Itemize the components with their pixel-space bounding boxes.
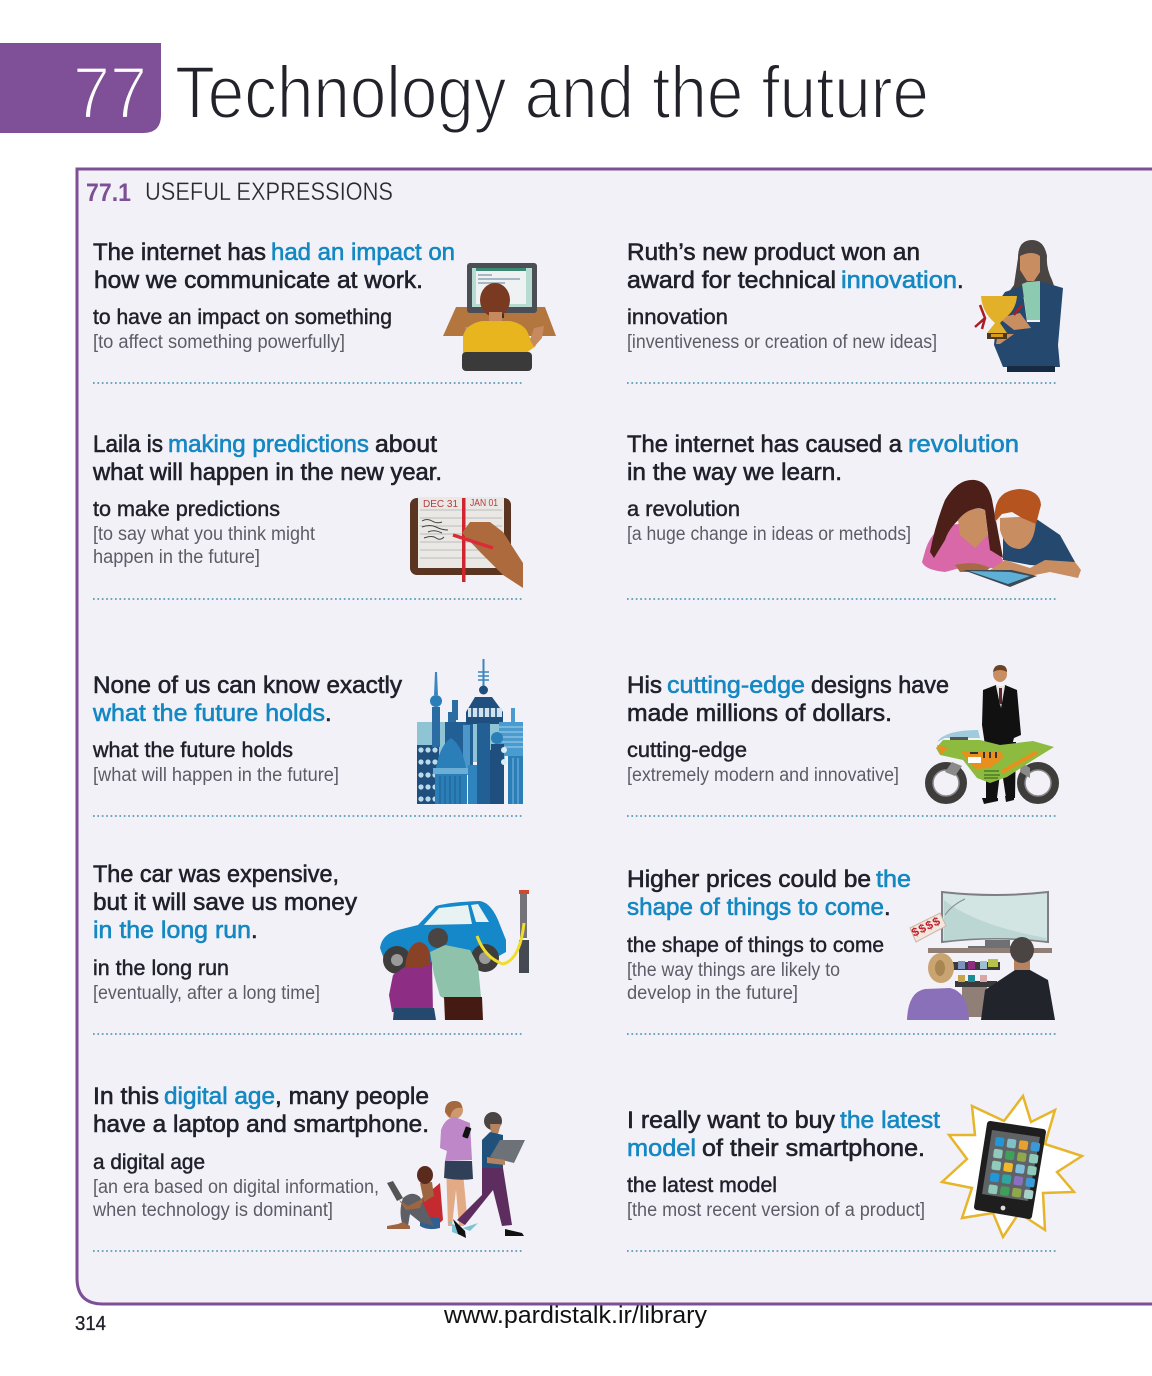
- card: the latest model: of their smartphone.: [702, 1135, 925, 1162]
- card: making predictions: making predictions: [168, 431, 369, 458]
- card: shape of things to come: develop in the future]: [627, 983, 798, 1004]
- card: innovation: Ruth’s new product won an: [627, 239, 920, 266]
- card: what the future holds: [what will happen in the future]: [93, 765, 339, 786]
- card: had an impact on: had an impact on: [271, 239, 455, 266]
- card: shape of things to come: [the way things are likely to: [627, 960, 840, 981]
- card: had an impact on: how we communicate at work.: [94, 267, 423, 294]
- card: what the future holds: what the future holds: [92, 700, 325, 727]
- card: making predictions: [to say what you think might: [93, 524, 316, 545]
- section heading: USEFUL EXPRESSIONS: [145, 178, 393, 206]
- source url: www.pardistalk.ir/library: [443, 1302, 707, 1329]
- card: the latest model: I really want to buy: [627, 1107, 835, 1134]
- icon: two people with tablet: [922, 480, 1081, 587]
- card: cutting-edge: designs have: [811, 672, 949, 699]
- card: had an impact on: [to affect something powerfully]: [93, 332, 345, 353]
- page number: 314: [75, 1313, 106, 1335]
- card: cutting-edge: [627, 672, 1056, 816]
- panel: useful expressions: [77, 169, 1152, 1304]
- card: innovation: [627, 239, 1056, 383]
- card: in the long run: in the long run: [93, 917, 251, 944]
- card: shape of things to come: the: [876, 866, 911, 893]
- chapter number tab: [0, 43, 161, 134]
- section heading: 77.1: [86, 179, 131, 207]
- icon: man with motorbike: [929, 665, 1055, 804]
- card: innovation: .: [957, 267, 964, 294]
- card: innovation: innovation: [841, 267, 957, 294]
- card: a revolution: revolution: [908, 431, 1019, 458]
- card: digital age: a digital age: [93, 1151, 205, 1174]
- card: shape of things to come: the shape of things to come: [627, 934, 884, 957]
- chapter number tab: 77: [73, 53, 147, 134]
- card: in the long run: [93, 861, 522, 1034]
- card: a revolution: [627, 431, 1056, 599]
- card: making predictions: Laila is: [93, 431, 163, 458]
- card: innovation: [inventiveness or creation of new ideas]: [627, 332, 937, 353]
- card: cutting-edge: made millions of dollars.: [627, 700, 892, 727]
- icon: tablet in star burst: [942, 1096, 1082, 1237]
- card: digital age: In this: [93, 1083, 159, 1110]
- card: making predictions: to make predictions: [93, 498, 280, 521]
- icon: curved TV and shoppers: $$$$: [909, 914, 943, 940]
- card: a revolution: in the way we learn.: [627, 459, 842, 486]
- card: shape of things to come: [627, 866, 1056, 1034]
- card: digital age: digital age: [164, 1083, 275, 1110]
- card: had an impact on: to have an impact on something: [93, 306, 392, 329]
- card: shape of things to come: Higher prices could be: [627, 866, 871, 893]
- icon: diary and hand: JAN 01: [470, 498, 498, 509]
- card: the latest model: model: [627, 1135, 696, 1162]
- card: cutting-edge: [extremely modern and innovative]: [627, 765, 899, 786]
- card: the latest model: [627, 1107, 1056, 1251]
- card: in the long run: .: [251, 917, 258, 944]
- card: digital age: have a laptop and smartphone.: [93, 1111, 429, 1138]
- card: innovation: award for technical: [627, 267, 836, 294]
- icon: woman with trophy: [975, 240, 1063, 372]
- icon: diary and hand: DEC 31: [423, 499, 458, 510]
- icon: three people with devices: [387, 1101, 525, 1238]
- icon: future city skyline: [417, 659, 523, 804]
- card: digital age: , many people: [275, 1083, 429, 1110]
- card: what the future holds: [92, 672, 522, 816]
- icon: curved TV and shoppers: [907, 892, 1055, 1020]
- card: what the future holds: .: [325, 700, 332, 727]
- card: making predictions: what will happen in the new year.: [92, 459, 442, 486]
- card: the latest model: [the most recent version of a product]: [627, 1200, 925, 1221]
- card: what the future holds: what the future holds: [92, 739, 293, 762]
- card: had an impact on: The internet has: [93, 239, 266, 266]
- card: cutting-edge: cutting-edge: [627, 739, 747, 762]
- card: making predictions: about: [375, 431, 437, 458]
- card: in the long run: [eventually, after a long time]: [93, 983, 320, 1004]
- card: innovation: innovation: [627, 306, 728, 329]
- card: cutting-edge: cutting-edge: [667, 672, 805, 699]
- card: in the long run: in the long run: [93, 957, 229, 980]
- card: making predictions: [92, 431, 522, 599]
- icon: person at computer: [443, 263, 556, 371]
- card: in the long run: but it will save us money: [93, 889, 357, 916]
- title: Technology and the future: [175, 51, 929, 134]
- card: had an impact on: [93, 239, 522, 383]
- card: the latest model: the latest model: [627, 1174, 777, 1197]
- card: a revolution: [a huge change in ideas or methods]: [627, 524, 911, 545]
- card: digital age: when technology is dominant]: [92, 1200, 333, 1221]
- card: digital age: [92, 1083, 522, 1251]
- card: a revolution: a revolution: [627, 498, 740, 521]
- card: the latest model: the latest: [840, 1107, 940, 1134]
- card: making predictions: happen in the future]: [93, 547, 260, 568]
- card: shape of things to come: .: [884, 894, 891, 921]
- card: cutting-edge: His: [627, 672, 662, 699]
- card: in the long run: The car was expensive,: [93, 861, 339, 888]
- card: shape of things to come: shape of things to come: [627, 894, 884, 921]
- card: a revolution: The internet has caused a: [627, 431, 903, 458]
- card: digital age: [an era based on digital information,: [93, 1177, 379, 1198]
- icon: electric car and couple: [380, 890, 529, 1020]
- card: what the future holds: None of us can know exactly: [93, 672, 402, 699]
- icon: diary and hand: [410, 497, 523, 588]
